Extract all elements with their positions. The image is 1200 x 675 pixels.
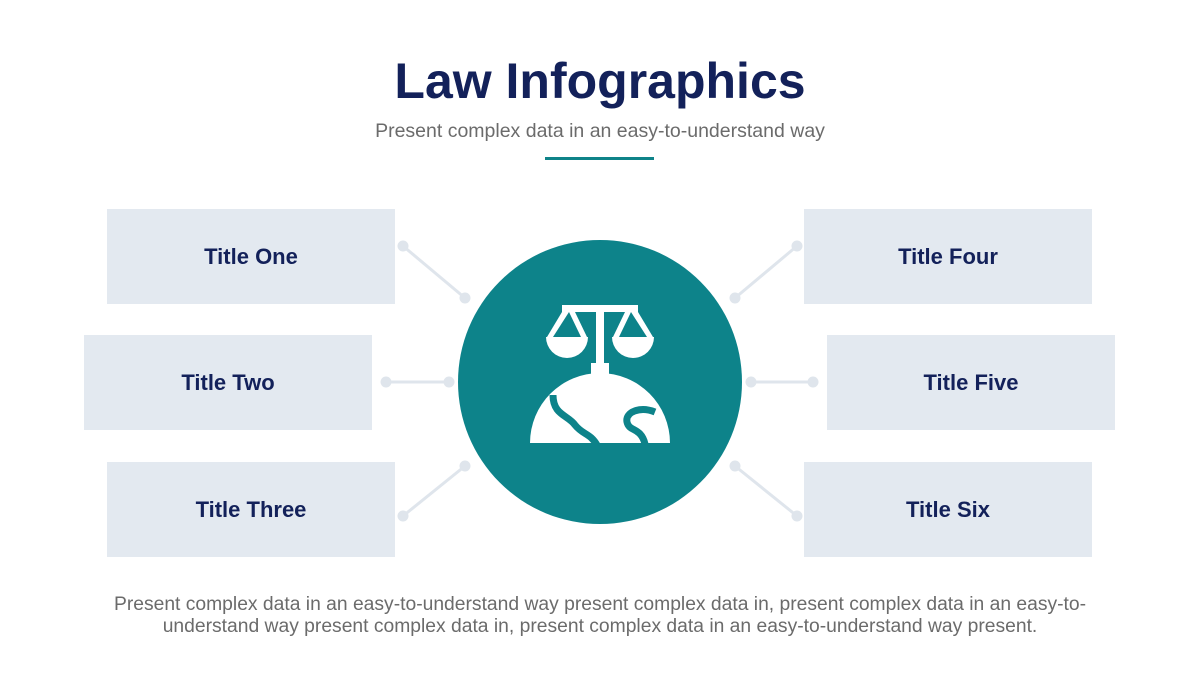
box: Title Three: [107, 462, 395, 557]
box: Title Six: [804, 462, 1092, 557]
body text: Present complex data in an easy-to-understand way present complex data in, present complex data in an easy-to-: [114, 594, 1086, 615]
underline accent: [545, 157, 654, 160]
body text: [114, 594, 1086, 637]
body text: understand way present complex data in, present complex data in an easy-to-understand way present.: [163, 616, 1037, 637]
title: Law Infographics: [394, 53, 806, 109]
box: Title Two: Title Two: [181, 370, 275, 394]
box: Title Five: [827, 335, 1115, 430]
box: Title Two: [84, 335, 372, 430]
central circle: [458, 240, 742, 524]
box: Title Six: Title Six: [906, 496, 990, 522]
subtitle: Present complex data in an easy-to-understand way: [375, 120, 825, 142]
box: Title Three: Title Three: [196, 496, 306, 522]
box: Title Four: Title Four: [898, 244, 998, 268]
box: Title One: [107, 209, 395, 304]
box: Title Five: Title Five: [924, 370, 1018, 394]
box: Title One: Title One: [204, 244, 298, 268]
icon: scales over globe: [530, 305, 670, 443]
box: Title Four: [804, 209, 1092, 304]
